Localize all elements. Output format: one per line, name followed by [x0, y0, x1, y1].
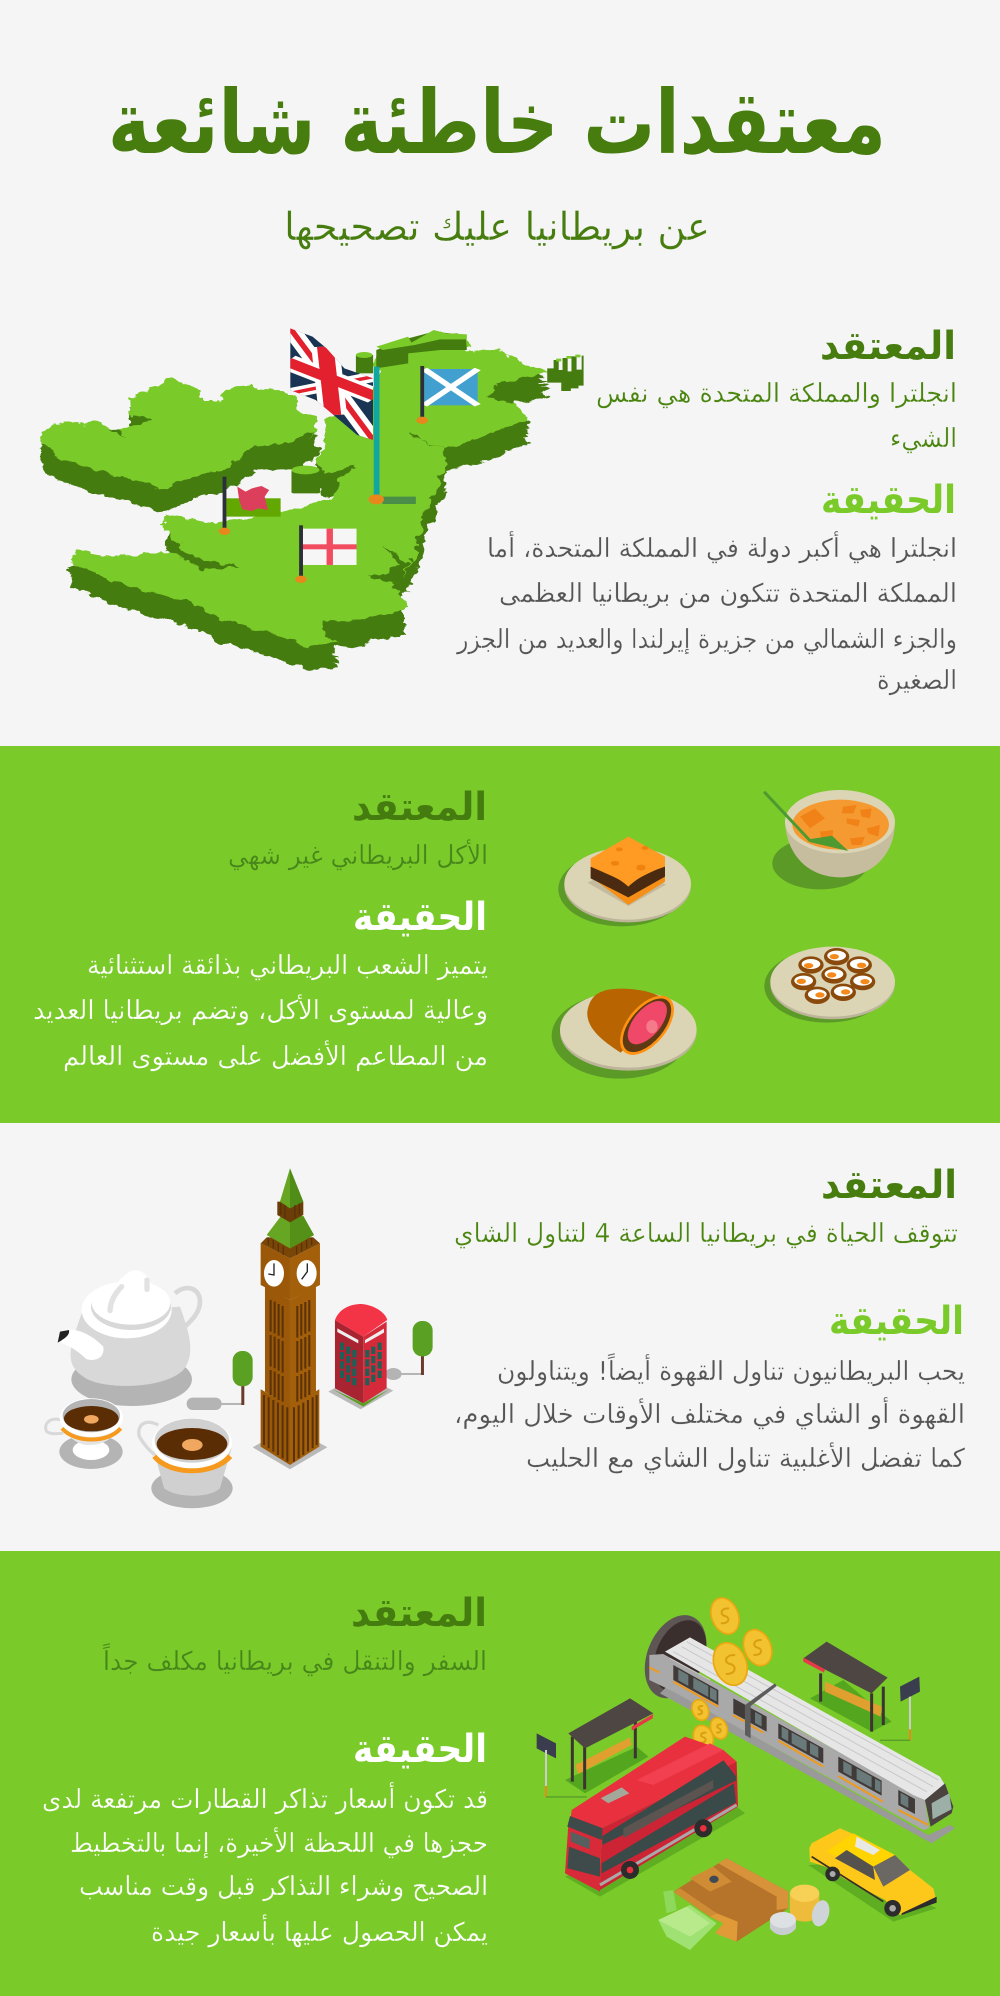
belief text: الشيء	[890, 424, 957, 454]
subtitle: عن بريطانيا عليك تصحيحها	[284, 205, 710, 250]
map: small islands	[291, 330, 584, 493]
icon: falling gold coins	[689, 1594, 777, 1752]
panel: myth 2, British food	[0, 746, 1000, 1123]
icon: large cup of tea	[139, 1418, 233, 1508]
flag: United Kingdom	[287, 327, 416, 504]
fact text: يحب البريطانيون تناول القهوة أيضاً! ويتناولون	[497, 1352, 965, 1387]
icon: tree with shadow, right	[385, 1321, 433, 1380]
belief text	[596, 379, 957, 454]
fact text	[42, 1781, 488, 1948]
fact text: انجلترا هي أكبر دولة في المملكة المتحدة، أما	[487, 530, 957, 564]
tea and London illustrations	[46, 1168, 433, 1508]
panel: myth 4, travel costs	[0, 1551, 1000, 1996]
heading: fact: الحقيقة	[353, 895, 487, 940]
icon: cake on plate	[558, 837, 691, 926]
fact text: كما تفضل الأغلبية تناول الشاي مع الحليب	[526, 1441, 966, 1474]
icon: yellow taxi	[808, 1828, 937, 1922]
fact text: المملكة المتحدة تتكون من بريطانيا العظمى	[499, 579, 957, 609]
heading: belief: المعتقد	[351, 1591, 487, 1636]
icon: bus shelter, left	[537, 1698, 653, 1797]
icon: train	[649, 1637, 955, 1843]
transport illustrations	[537, 1594, 955, 1950]
flag: Wales	[219, 477, 281, 535]
fact text: يمكن الحصول عليها بأسعار جيدة	[151, 1913, 488, 1948]
fact text: والجزء الشمالي من جزيرة إيرلندا والعديد من الجزر	[455, 625, 957, 655]
belief text: السفر والتنقل في بريطانيا مكلف جداً	[102, 1642, 487, 1677]
heading: fact: الحقيقة	[829, 1299, 964, 1344]
map of the United Kingdom with flags	[41, 327, 584, 671]
fact text: الصحيح وشراء التذاكر قبل وقت مناسب	[79, 1872, 488, 1902]
icon: tunnel	[633, 1606, 718, 1707]
fact text	[454, 1352, 966, 1474]
heading: belief: المعتقد	[352, 785, 487, 830]
icon: soup bowl with spoon	[765, 790, 895, 889]
fact text: الصغيرة	[877, 666, 957, 696]
text block: myth 4	[42, 1591, 488, 1948]
fact text	[33, 951, 488, 1072]
fact text: وعالية لمستوى الأكل، وتضم بريطانيا العديد	[33, 993, 488, 1026]
icon: small cup of tea	[46, 1398, 123, 1469]
fact text: قد تكون أسعار تذاكر القطارات مرتفعة لدى	[42, 1781, 488, 1815]
fact text	[455, 530, 957, 696]
heading: fact: الحقيقة	[821, 478, 956, 523]
heading: belief: المعتقد	[821, 1163, 957, 1208]
icon: beef wellington on plate	[552, 986, 697, 1079]
icon: red double-decker bus	[565, 1737, 745, 1897]
icon: Big Ben clock tower	[253, 1168, 327, 1469]
flag: England	[295, 525, 357, 583]
icon: scotch eggs on plate	[764, 947, 895, 1023]
icon: bus shelter, right	[803, 1642, 920, 1741]
flag: Scotland	[416, 366, 478, 424]
text block: myth 2	[33, 785, 488, 1072]
fact text: يتميز الشعب البريطاني بذائقة استثنائية	[87, 951, 488, 981]
food illustrations	[552, 790, 895, 1079]
icon: tree with shadow, left	[187, 1351, 253, 1410]
belief text: انجلترا والمملكة المتحدة هي نفس	[596, 379, 957, 409]
map: Great Britain	[70, 332, 549, 671]
panel: myth 1, England and the UK	[41, 324, 957, 696]
belief text: تتوقف الحياة في بريطانيا الساعة 4 لتناول الشاي	[454, 1219, 958, 1249]
heading: fact: الحقيقة	[353, 1727, 487, 1772]
fact text: حجزها في اللحظة الأخيرة، إنما بالتخطيط	[70, 1826, 488, 1859]
icon: teapot	[58, 1270, 200, 1406]
fact text: القهوة أو الشاي في مختلف الأوقات خلال اليوم،	[454, 1396, 965, 1430]
text block: myth 3	[454, 1163, 966, 1474]
heading: belief: المعتقد	[820, 324, 956, 369]
panel: myth 3, tea time	[46, 1163, 966, 1508]
text block: myth 1	[455, 324, 957, 696]
icon: wallet with money and coins	[658, 1858, 832, 1950]
fact text: من المطاعم الأفضل على مستوى العالم	[63, 1039, 488, 1072]
map: Ireland	[41, 378, 317, 514]
icon: red telephone box	[328, 1304, 393, 1409]
belief text: الأكل البريطاني غير شهي	[228, 838, 488, 871]
